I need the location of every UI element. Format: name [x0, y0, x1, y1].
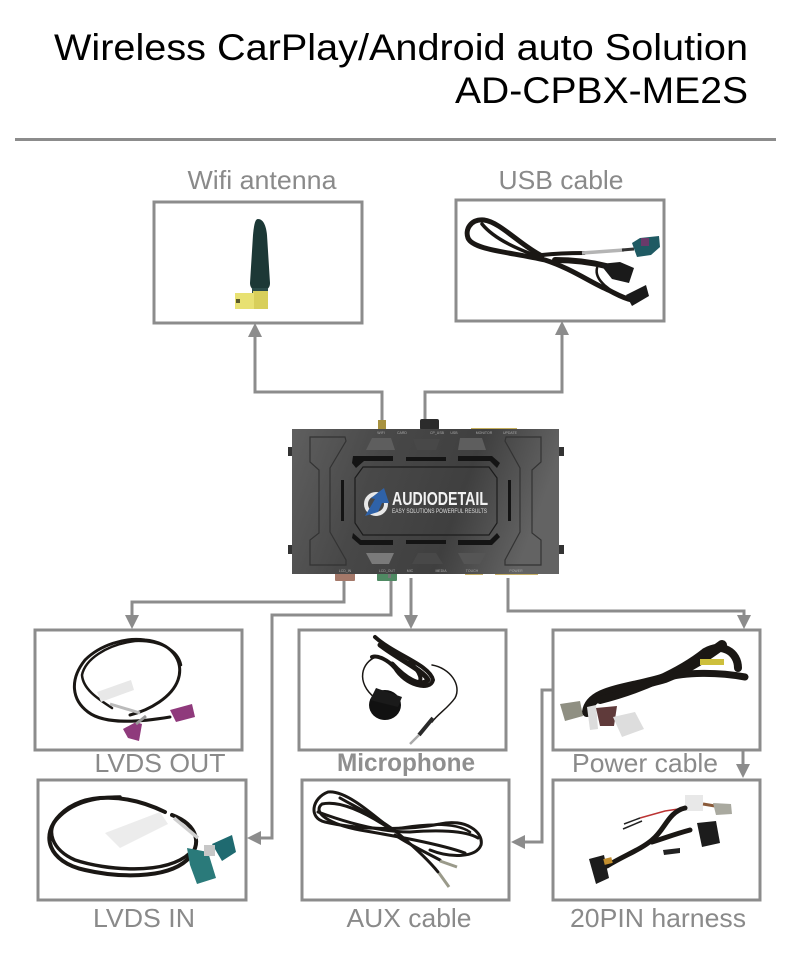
title: Wireless CarPlay/Android auto Solution — [54, 27, 748, 68]
label: 20PIN harness: 20PIN harness — [570, 903, 746, 933]
port labels: TOUCH — [466, 569, 479, 573]
icon: AUX cable — [314, 792, 481, 887]
port labels: POWER — [509, 569, 523, 573]
port labels: USB — [450, 431, 458, 435]
port labels: WIFI — [377, 431, 385, 435]
icon: power cable — [560, 645, 745, 737]
arrows: connections — [125, 321, 751, 849]
panel: Wifi antenna — [154, 165, 362, 323]
device vents — [366, 438, 486, 564]
logo: AUDIODETAIL: EASY SOLUTIONS POWERFUL RESULTS — [392, 509, 487, 515]
port labels: MIC — [407, 569, 414, 573]
label: LVDS IN: LVDS IN — [93, 903, 195, 933]
device panel outlines — [310, 437, 541, 565]
port labels — [339, 431, 523, 573]
icon: microphone — [363, 637, 457, 744]
label: Wifi antenna: Wifi antenna — [188, 165, 337, 195]
panel: LVDS OUT — [35, 630, 242, 778]
title — [54, 27, 748, 111]
panel: LVDS IN — [38, 780, 246, 933]
label: Power cable: Power cable — [572, 748, 718, 778]
icon: 20PIN harness — [589, 795, 732, 884]
label: USB cable: USB cable — [498, 165, 624, 195]
icon: antenna — [235, 219, 270, 309]
title: AD-CPBX-ME2S — [455, 70, 748, 111]
panel: USB cable — [456, 165, 664, 321]
panel: AUX cable — [302, 780, 509, 933]
port labels: MONITOR — [476, 431, 493, 435]
icon: LVDS IN cable — [49, 797, 236, 884]
logo: AUDIODETAIL: AUDIODETAIL — [392, 489, 488, 509]
label: AUX cable: AUX cable — [346, 903, 472, 933]
panel: 20PIN harness — [553, 780, 760, 933]
port labels: LCD_IN — [339, 569, 352, 573]
port labels: MEDIA — [435, 569, 447, 573]
port labels: CARD — [397, 431, 407, 435]
port labels: UPDATE — [503, 431, 518, 435]
port labels: LCD_OUT — [379, 569, 396, 573]
panel: Microphone — [299, 630, 506, 777]
panel: Power cable — [553, 630, 760, 778]
logo: AUDIODETAIL — [365, 488, 488, 516]
device slots — [341, 456, 511, 545]
icon: LVDS OUT cable — [74, 639, 195, 741]
port labels: CP_USB — [430, 431, 445, 435]
device: AUDIODETAIL box — [288, 419, 564, 581]
label: Microphone: Microphone — [337, 749, 475, 777]
label: LVDS OUT: LVDS OUT — [94, 748, 226, 778]
icon: USB cable — [467, 220, 660, 306]
